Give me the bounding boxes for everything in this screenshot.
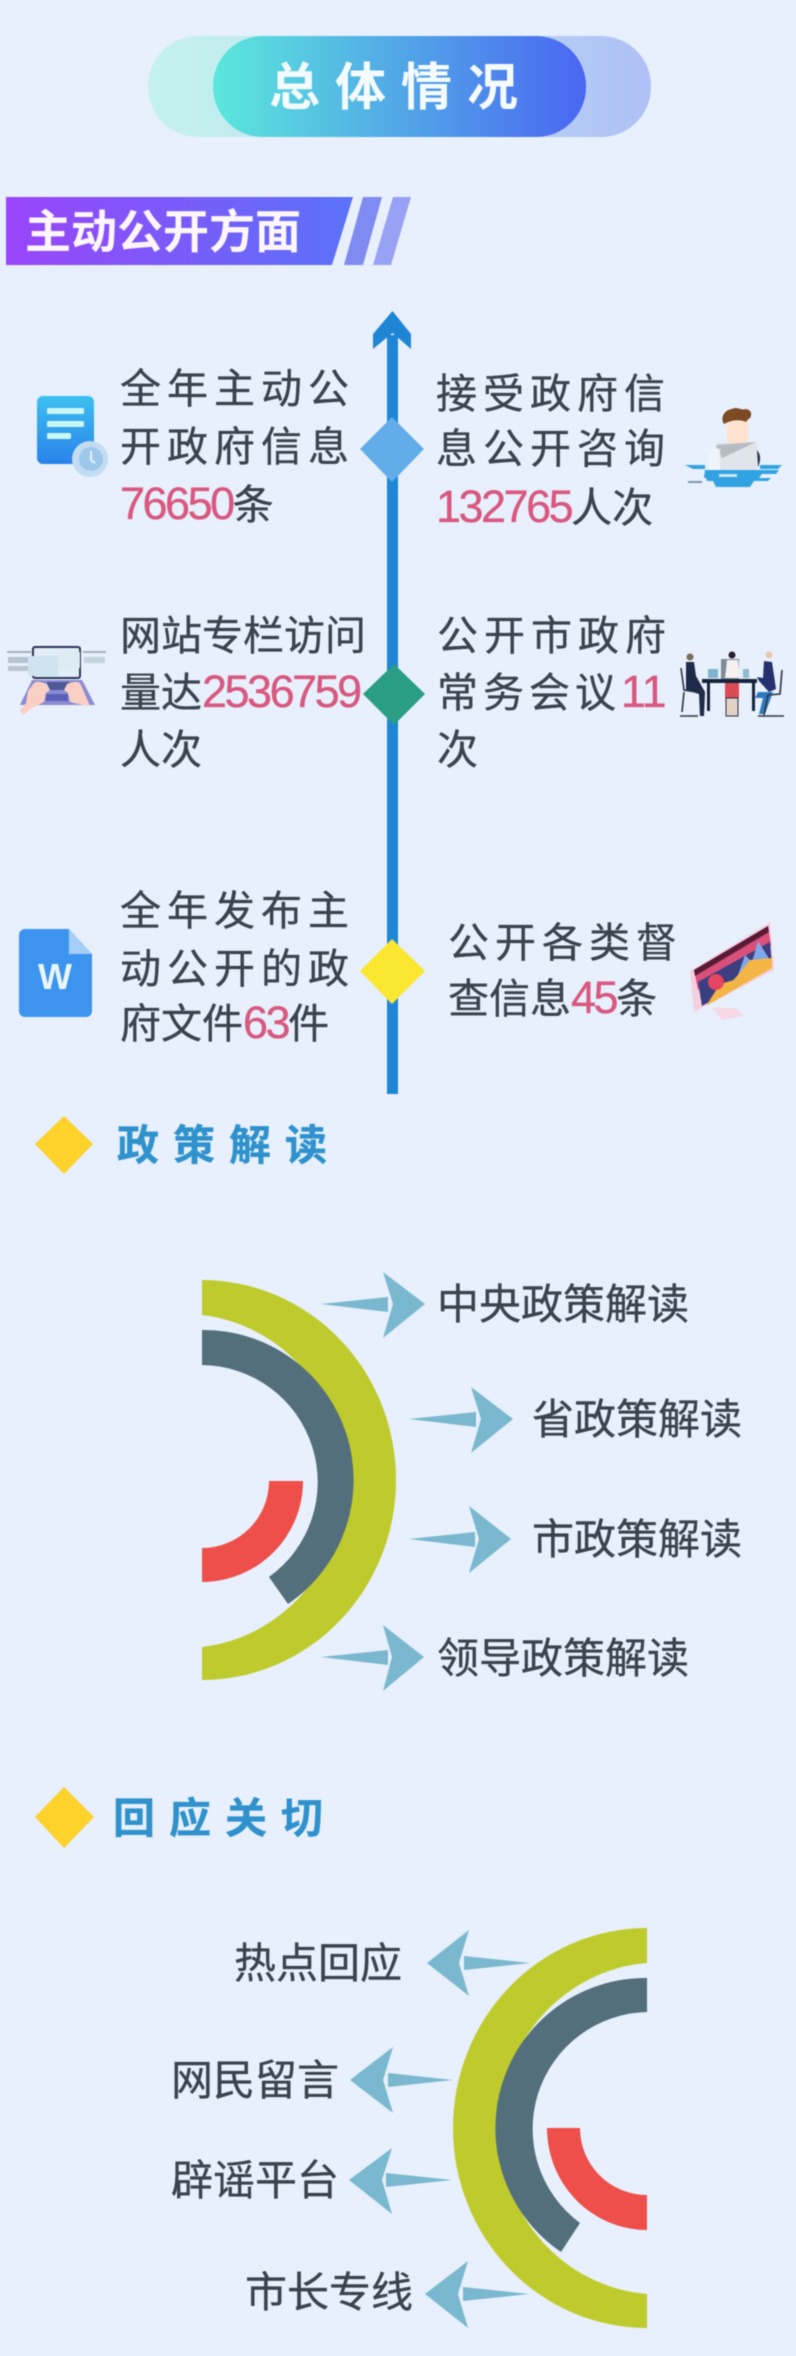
arrow: 网民留言 [350, 2047, 453, 2113]
timeline diamond 2 [363, 664, 425, 725]
text: 全年发布主动公开的政府文件63件: 府文件63件 [120, 997, 329, 1048]
label: 市政策解读: 市政策解读 [532, 1516, 742, 1563]
text: 全年发布主动公开的政府文件63件: 动公开的政 [120, 946, 355, 992]
chart: 回应关切 arcs [453, 1928, 647, 2328]
label: 中央政策解读: 中央政策解读 [437, 1281, 689, 1328]
arc: red inner [202, 1481, 303, 1582]
text: 接受政府信息公开咨询132765人次 [436, 371, 671, 532]
heading: 回应关切: 回应关切 [113, 1795, 337, 1842]
timeline diamond 3 [360, 939, 425, 1004]
heading: 政策解读: 政策解读 [117, 1122, 341, 1169]
label: 热点回应: 热点回应 [234, 1940, 402, 1987]
text: 接受政府信息公开咨询132765人次: 息公开咨询 [436, 426, 671, 472]
text: 公开市政府常务会议11次: 常务会议11 [437, 666, 666, 717]
text: 网站专栏访问量达2536759人次: 量达2536759 [120, 666, 360, 717]
arc: olive outer [202, 1280, 396, 1680]
text: 公开市政府常务会议11次: 公开市政府 [437, 613, 672, 659]
icon: Word document [19, 929, 92, 1017]
text: 全年主动公开政府信息76650条 [120, 366, 355, 529]
icon: hands on laptop keyboard [7, 647, 106, 715]
text: 网站专栏访问量达2536759人次: 人次 [120, 727, 202, 773]
arrow: 市长专线 [425, 2261, 529, 2328]
text: 网站专栏访问量达2536759人次: 网站专栏访问 [120, 613, 366, 659]
banner: 主动公开方面 [6, 197, 411, 265]
heading: 政策解读 [35, 1116, 341, 1174]
arrow: 市政策解读 [409, 1506, 511, 1573]
icon: person at laptop [685, 408, 782, 487]
text: 接受政府信息公开咨询132765人次: 接受政府信 [436, 371, 671, 417]
text: 接受政府信息公开咨询132765人次: 132765人次 [436, 481, 653, 532]
arrow: 热点回应 [427, 1930, 530, 1996]
text: 公开各类督查信息45条: 查信息45条 [448, 972, 657, 1023]
icon: meeting at table [680, 652, 784, 716]
text: 公开各类督查信息45条 [448, 920, 683, 1023]
timeline diamond 1 [360, 417, 424, 482]
arc: slate middle [202, 1330, 354, 1604]
title: 总体情况 [269, 59, 533, 116]
icon: Word document: W [38, 956, 72, 997]
arrow: 领导政策解读 [321, 1625, 424, 1691]
text: 全年主动公开政府信息76650条: 开政府信息 [120, 424, 355, 470]
arrow: 中央政策解读 [321, 1272, 425, 1338]
text: 公开市政府常务会议11次 [437, 613, 672, 773]
label: 网民留言: 网民留言 [171, 2057, 339, 2104]
arrow: 省政策解读 [409, 1387, 513, 1453]
banner: 主动公开方面: 主动公开方面 [25, 206, 301, 258]
title pill [148, 36, 651, 137]
icon: monitor with charts [690, 922, 774, 1020]
text: 全年主动公开政府信息76650条: 全年主动公 [120, 366, 355, 412]
text: 全年发布主动公开的政府文件63件 [120, 888, 355, 1048]
arc: olive outer [453, 1928, 647, 2328]
arc: red inner [547, 2128, 647, 2230]
label: 市长专线: 市长专线 [245, 2269, 413, 2316]
heading: 回应关切 [35, 1787, 337, 1848]
text: 公开各类督查信息45条: 公开各类督 [448, 920, 683, 966]
label: 辟谣平台: 辟谣平台 [171, 2157, 339, 2204]
text: 全年主动公开政府信息76650条: 76650条 [120, 478, 274, 529]
arrow: 辟谣平台 [349, 2148, 452, 2214]
icon: document with clock [37, 396, 108, 477]
label: 省政策解读: 省政策解读 [532, 1396, 742, 1443]
text: 公开市政府常务会议11次: 次 [437, 727, 478, 773]
timeline axis with arrow [373, 311, 411, 1094]
text: 网站专栏访问量达2536759人次 [120, 613, 366, 773]
text: 全年发布主动公开的政府文件63件: 全年发布主 [120, 888, 355, 934]
arc: slate middle [495, 1978, 647, 2252]
label: 领导政策解读: 领导政策解读 [437, 1635, 689, 1682]
chart: 政策解读 arcs [202, 1280, 396, 1680]
